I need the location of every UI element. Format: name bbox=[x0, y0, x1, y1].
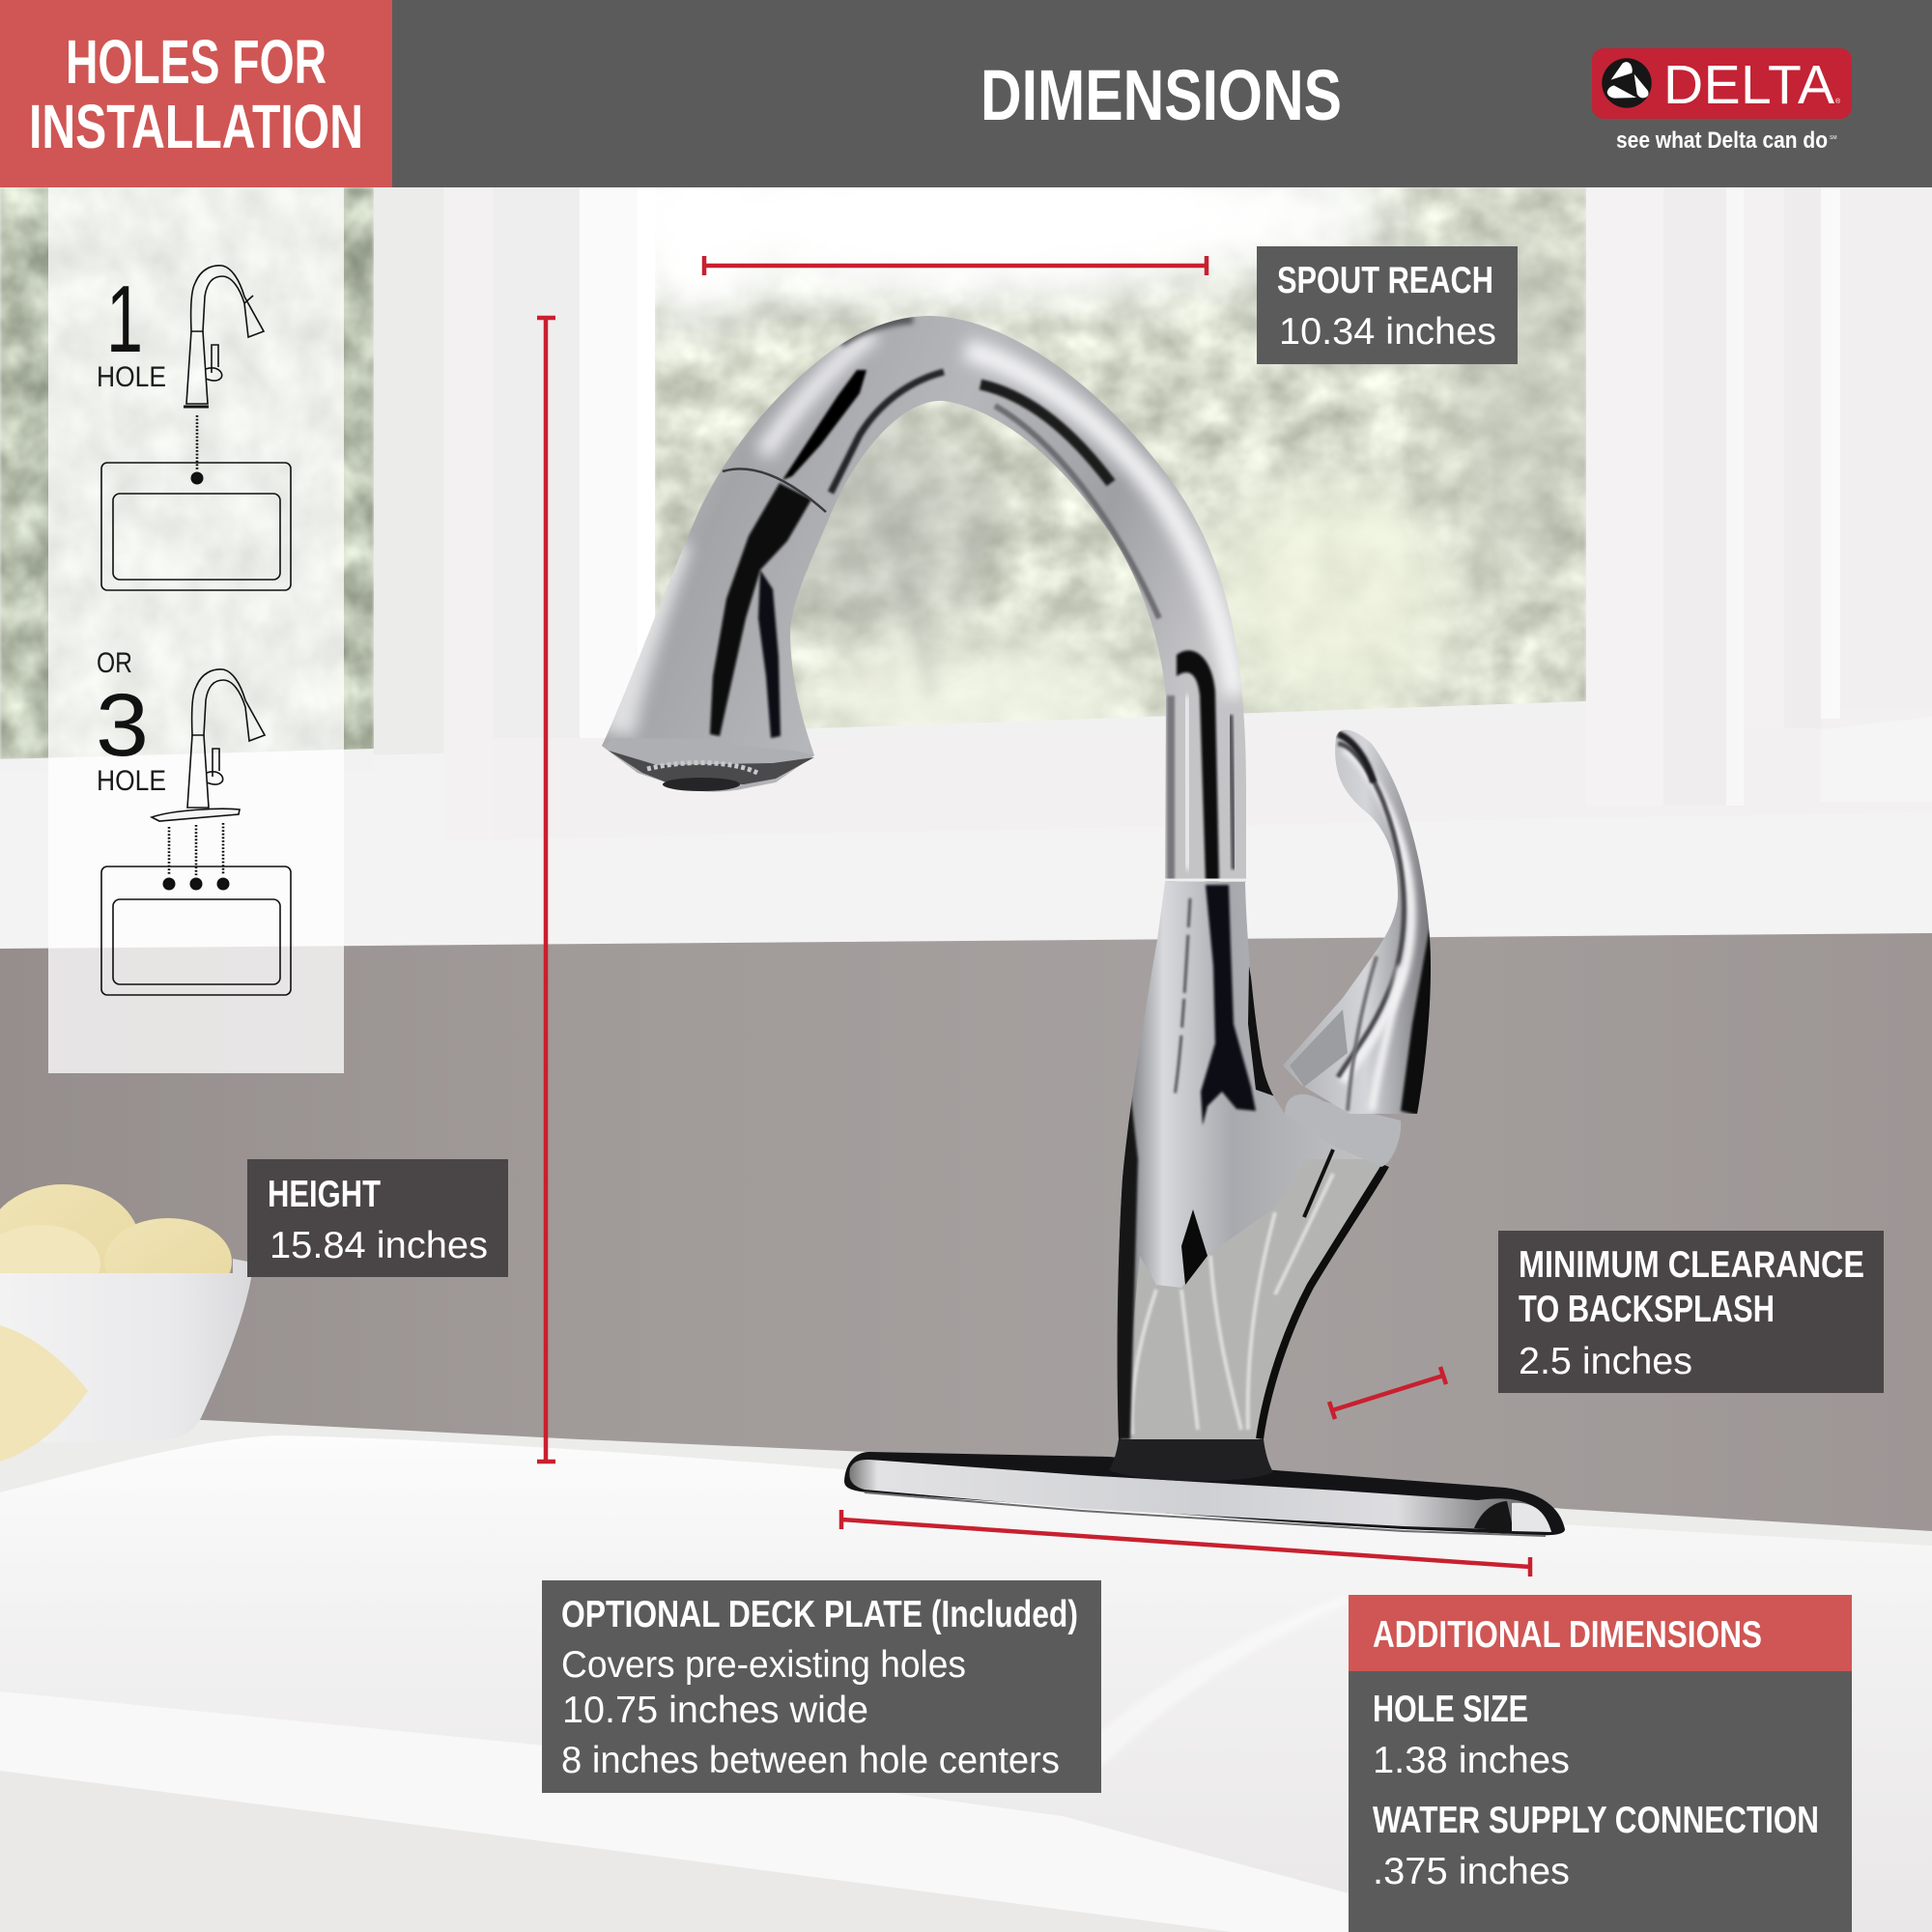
option: 1 hole bbox=[97, 266, 291, 590]
callout: optional deck plate bbox=[542, 1580, 1101, 1793]
header bar bbox=[0, 0, 1932, 187]
wall bbox=[0, 933, 1932, 1546]
panel heading: ADDITIONAL DIMENSIONS bbox=[1373, 1614, 1762, 1656]
callout: height bbox=[247, 1159, 508, 1277]
water supply connection: WATER SUPPLY CONNECTION bbox=[1373, 1800, 1819, 1841]
callout: height: 15.84 inches bbox=[270, 1225, 488, 1266]
callout: optional deck plate: 10.75 inches wide bbox=[562, 1690, 868, 1731]
callout: minimum clearance: TO BACKSPLASH bbox=[1519, 1289, 1775, 1330]
option: or 3 hole: 3 bbox=[96, 676, 149, 775]
option: or 3 hole: OR bbox=[97, 647, 132, 679]
logo: Delta: see what Delta can do bbox=[1616, 128, 1828, 154]
hole size: 1.38 inches bbox=[1373, 1740, 1570, 1781]
callout: spout reach: SPOUT REACH bbox=[1277, 260, 1493, 301]
title: DIMENSIONS bbox=[980, 55, 1342, 135]
lemons in a white bowl bbox=[0, 1184, 253, 1462]
logo: Delta: ® bbox=[1835, 98, 1841, 105]
water supply connection: .375 inches bbox=[1373, 1851, 1570, 1892]
callout: height: HEIGHT bbox=[268, 1174, 381, 1215]
background: kitchen window bbox=[0, 184, 1932, 956]
dimension line: clearance bbox=[1329, 1367, 1446, 1419]
callout: spout reach: 10.34 inches bbox=[1279, 311, 1496, 353]
deck plate bbox=[844, 1452, 1565, 1536]
dimension line: height bbox=[537, 318, 555, 1462]
panel: additional dimensions bbox=[1349, 1595, 1852, 1932]
heading: holes for installation bbox=[0, 0, 392, 187]
option: 1 hole: HOLE bbox=[97, 361, 166, 393]
heading: holes for installation: INSTALLATION bbox=[29, 92, 363, 161]
panel: hole options bbox=[48, 187, 344, 1073]
dimension line: deck plate bbox=[841, 1510, 1530, 1577]
callout: minimum clearance: 2.5 inches bbox=[1519, 1341, 1692, 1382]
hole size: HOLE SIZE bbox=[1373, 1689, 1528, 1730]
option: or 3 hole bbox=[96, 647, 291, 995]
hole size bbox=[1373, 1689, 1570, 1781]
window view: trees, main pane bbox=[655, 187, 1586, 728]
base ring bbox=[1109, 1439, 1273, 1481]
option: 1 hole: 1 bbox=[106, 266, 143, 372]
pull-down spout bbox=[580, 299, 1256, 889]
counter and sink bbox=[0, 1420, 1932, 1932]
callout: optional deck plate: Covers pre-existing holes bbox=[561, 1644, 966, 1686]
spray head face bbox=[602, 738, 814, 792]
logo: Delta bbox=[1592, 48, 1852, 154]
option: or 3 hole: HOLE bbox=[97, 765, 166, 797]
handle collar bbox=[1285, 1094, 1401, 1167]
logo: Delta: DELTA bbox=[1663, 54, 1834, 116]
heading: holes for installation: HOLES FOR bbox=[66, 27, 327, 97]
logo: Delta: SM bbox=[1830, 135, 1837, 141]
faucet bbox=[580, 299, 1565, 1536]
dimension line: spout reach bbox=[704, 256, 1207, 275]
callout: minimum clearance bbox=[1498, 1231, 1884, 1393]
window view: trees, left pane bbox=[0, 187, 374, 773]
callout: optional deck plate: OPTIONAL DECK PLATE (Included) bbox=[561, 1594, 1078, 1635]
body bbox=[1111, 869, 1401, 1449]
water supply connection bbox=[1373, 1800, 1819, 1892]
panel heading bbox=[1349, 1595, 1852, 1671]
lever handle bbox=[1283, 730, 1431, 1114]
callout: optional deck plate: 8 inches between hole centers bbox=[561, 1740, 1060, 1781]
callout: minimum clearance: MINIMUM CLEARANCE bbox=[1519, 1244, 1864, 1286]
callout: spout reach bbox=[1257, 246, 1518, 364]
